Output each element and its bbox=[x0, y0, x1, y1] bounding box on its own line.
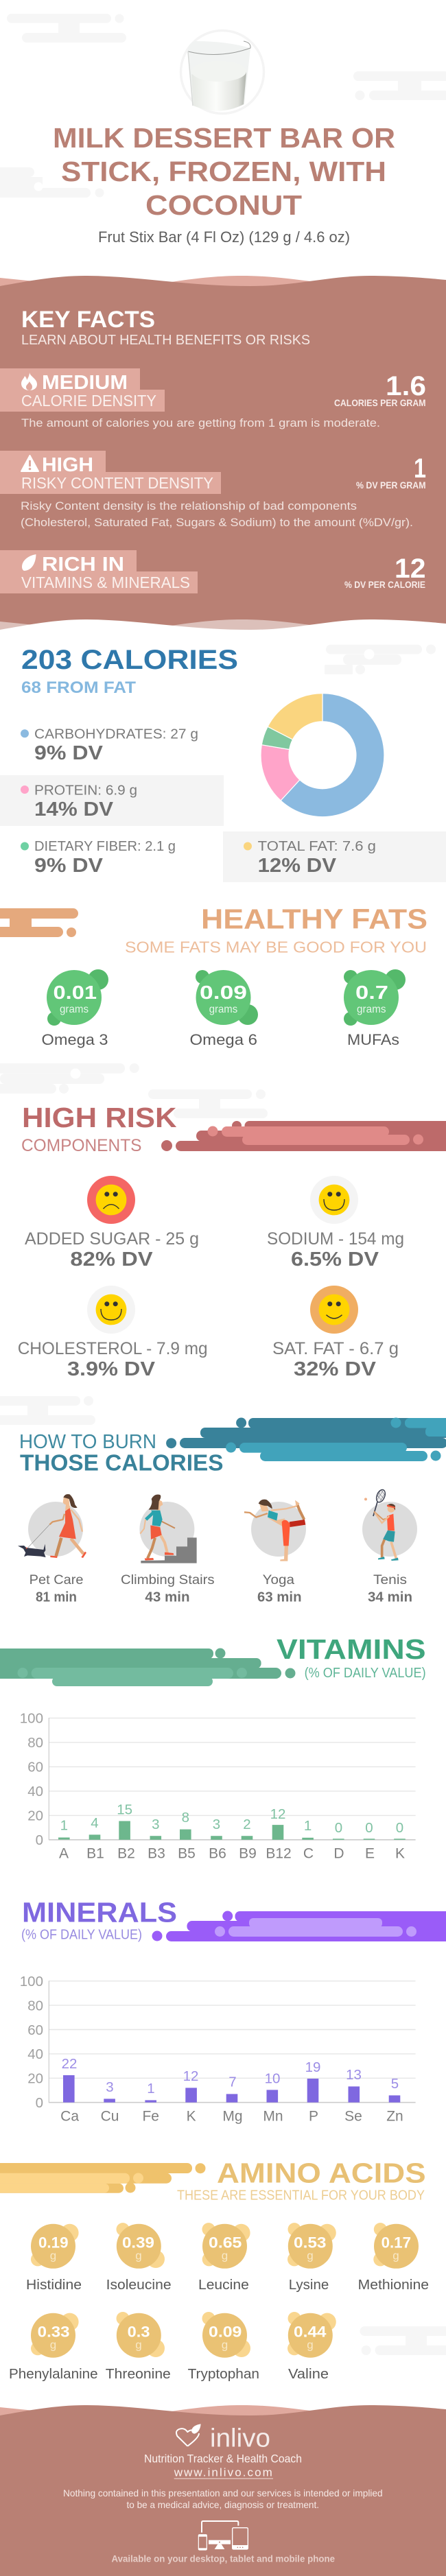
saturated fat bbox=[272, 1286, 399, 1380]
bar chart: vitamins: 3 bbox=[152, 1817, 160, 1832]
methionine: Methionine bbox=[358, 2278, 429, 2293]
methionine bbox=[358, 2223, 429, 2293]
panel: minerals bbox=[20, 1897, 446, 2125]
icon: devices bbox=[198, 2521, 248, 2550]
panel: footer bbox=[0, 2405, 446, 2576]
protein: 14% DV bbox=[34, 799, 114, 820]
protein: PROTEIN: 6.9 g bbox=[34, 783, 137, 799]
title: COCONUT bbox=[145, 189, 302, 221]
bar chart: minerals: 60 bbox=[27, 2022, 43, 2038]
added sugar: 82% DV bbox=[70, 1249, 153, 1271]
subheading: from fat: 68 FROM FAT bbox=[21, 678, 136, 697]
activity: climbing stairs: 43 min bbox=[145, 1590, 189, 1605]
cholesterol bbox=[18, 1286, 208, 1380]
bar chart: vitamins: 80 bbox=[27, 1735, 43, 1751]
bar chart: vitamins: B5 bbox=[178, 1846, 196, 1862]
panel: healthy fats bbox=[0, 903, 427, 1048]
protein bbox=[0, 775, 224, 826]
bar chart: vitamins bbox=[20, 1711, 416, 1862]
medium calorie density: CALORIES PER GRAM bbox=[334, 397, 425, 408]
high risky content density bbox=[0, 451, 426, 529]
icon: glass of milk bbox=[181, 30, 263, 114]
isoleucine bbox=[106, 2223, 172, 2293]
bar chart: vitamins: A bbox=[59, 1846, 69, 1862]
bar chart: minerals: 80 bbox=[27, 1998, 43, 2013]
bar chart: minerals: K bbox=[187, 2109, 196, 2125]
title: MILK DESSERT BAR OR bbox=[53, 122, 395, 154]
dietary fiber: DIETARY FIBER: 2.1 g bbox=[34, 839, 176, 854]
valine: Valine bbox=[288, 2367, 329, 2382]
methionine: g bbox=[392, 2249, 399, 2262]
isoleucine: 0.39 bbox=[122, 2234, 154, 2252]
high risky content density: HIGH bbox=[42, 454, 93, 476]
high risky content density: % DV PER GRAM bbox=[356, 480, 425, 491]
added sugar: ADDED SUGAR - 25 g bbox=[25, 1229, 199, 1249]
bar chart: minerals: 22 bbox=[62, 2056, 77, 2072]
heading: calories: 203 CALORIES bbox=[21, 645, 238, 675]
omega 3: 0.01 bbox=[54, 982, 97, 1003]
threonine: g bbox=[135, 2338, 142, 2351]
phenylalanine: Phenylalanine bbox=[9, 2367, 98, 2382]
sodium bbox=[267, 1176, 404, 1271]
threonine: 0.3 bbox=[128, 2324, 150, 2341]
subheading: components: COMPONENTS bbox=[21, 1136, 141, 1155]
high risky content density: (Cholesterol, Saturated Fat, Sugars & Sodium) to the amount (%DV/gr). bbox=[21, 517, 413, 529]
bar chart: vitamins: 4 bbox=[91, 1815, 99, 1831]
bar chart: vitamins: 0 bbox=[36, 1832, 43, 1848]
heading: vitamins: VITAMINS bbox=[277, 1633, 426, 1665]
cholesterol: 3.9% DV bbox=[67, 1358, 156, 1380]
disclaimer bbox=[63, 2488, 383, 2510]
panel: how to burn those calories bbox=[0, 1396, 446, 1605]
threonine: Threonine bbox=[106, 2367, 171, 2382]
omega 6 bbox=[189, 970, 258, 1048]
donut chart bbox=[261, 694, 384, 817]
methionine: 0.17 bbox=[382, 2234, 411, 2252]
bar chart: vitamins: 2 bbox=[243, 1817, 251, 1832]
background cloud bbox=[360, 2326, 446, 2355]
histidine: Histidine bbox=[26, 2278, 82, 2293]
bar chart: minerals: 5 bbox=[391, 2076, 399, 2092]
bar chart: vitamins: 20 bbox=[27, 1808, 43, 1824]
added sugar bbox=[25, 1176, 199, 1271]
activity: yoga bbox=[244, 1500, 306, 1605]
bar chart: vitamins: C bbox=[303, 1846, 314, 1862]
bar chart: vitamins: 0 bbox=[396, 1820, 403, 1836]
website link: www.inlivo.com bbox=[174, 2466, 272, 2479]
bar chart: vitamins: 60 bbox=[27, 1760, 43, 1775]
total fat: 12% DV bbox=[258, 855, 337, 877]
heading: key facts: KEY FACTS bbox=[21, 307, 155, 333]
panel: calories and macronutrients bbox=[0, 645, 446, 882]
saturated fat: SAT. FAT - 6.7 g bbox=[272, 1339, 399, 1358]
bar chart: minerals: Cu bbox=[101, 2109, 119, 2125]
heading: amino acids: AMINO ACIDS bbox=[217, 2158, 426, 2189]
decorative banner: teal bbox=[166, 1417, 446, 1461]
carbohydrates: CARBOHYDRATES: 27 g bbox=[34, 727, 198, 742]
heading: minerals: MINERALS bbox=[22, 1897, 177, 1928]
bar chart: minerals: 7 bbox=[228, 2075, 237, 2090]
heading: those calories: THOSE CALORIES bbox=[20, 1450, 224, 1476]
disclaimer: Nothing contained in this presentation and our services is intended or implied bbox=[63, 2488, 383, 2498]
mufas: MUFAs bbox=[347, 1031, 399, 1048]
tryptophan: g bbox=[222, 2338, 228, 2351]
lysine: Lysine bbox=[289, 2278, 329, 2293]
bar chart: minerals: Zn bbox=[386, 2109, 403, 2125]
heading: healthy fats: HEALTHY FATS bbox=[201, 903, 427, 935]
bar chart: minerals: 19 bbox=[305, 2059, 320, 2075]
title: STICK, FROZEN, WITH bbox=[61, 156, 386, 187]
mufas bbox=[344, 969, 406, 1048]
background clouds bbox=[0, 1063, 268, 1118]
bar chart: minerals: 1 bbox=[147, 2081, 155, 2096]
medium calorie density: CALORIE DENSITY bbox=[21, 392, 156, 410]
subheading: daily value: (% OF DAILY VALUE) bbox=[305, 1666, 426, 1681]
bar chart: minerals: 20 bbox=[27, 2071, 43, 2087]
omega 6: 0.09 bbox=[200, 982, 247, 1003]
subheading: SOME FATS MAY BE GOOD FOR YOU bbox=[125, 938, 427, 956]
disclaimer: to be a medical advice, diagnosis or treatment. bbox=[126, 2499, 319, 2510]
bar chart: vitamins: K bbox=[395, 1846, 405, 1862]
panel: high risk components bbox=[0, 1063, 446, 1380]
lysine bbox=[287, 2223, 336, 2293]
bar chart: vitamins: B12 bbox=[266, 1846, 292, 1862]
bar chart: minerals: Ca bbox=[60, 2109, 79, 2125]
activity: climbing stairs: Climbing Stairs bbox=[121, 1573, 215, 1587]
bar chart: vitamins: 0 bbox=[365, 1820, 373, 1836]
histidine bbox=[26, 2224, 82, 2293]
bar chart: vitamins: 0 bbox=[335, 1820, 342, 1836]
bar chart: vitamins: 8 bbox=[182, 1810, 189, 1825]
medium calorie density: MEDIUM bbox=[42, 372, 128, 394]
background cloud bbox=[0, 1396, 95, 1425]
heading: how to burn: HOW TO BURN bbox=[19, 1431, 156, 1453]
icon: woman climbing stairs bbox=[140, 1494, 197, 1563]
bar chart: minerals: Fe bbox=[142, 2109, 159, 2125]
bar chart: vitamins: B1 bbox=[86, 1846, 104, 1862]
rich in vitamins and minerals: RICH IN bbox=[42, 554, 124, 576]
rich in vitamins and minerals bbox=[0, 550, 425, 593]
bar chart: minerals: Se bbox=[344, 2109, 362, 2125]
isoleucine: Isoleucine bbox=[106, 2278, 172, 2293]
leucine: Leucine bbox=[198, 2278, 249, 2293]
bar chart: vitamins: 3 bbox=[213, 1817, 220, 1832]
saturated fat: 32% DV bbox=[294, 1358, 377, 1380]
tryptophan bbox=[188, 2312, 259, 2382]
bar chart: minerals: 10 bbox=[265, 2071, 280, 2087]
bar chart: minerals: 0 bbox=[36, 2095, 43, 2111]
decorative banner: orange bbox=[0, 908, 78, 937]
histidine: 0.19 bbox=[38, 2234, 69, 2252]
lysine: 0.53 bbox=[294, 2234, 327, 2252]
omega 3 bbox=[41, 969, 108, 1048]
leucine: g bbox=[222, 2249, 228, 2262]
histidine: g bbox=[50, 2249, 56, 2262]
heading: high risk: HIGH RISK bbox=[22, 1102, 177, 1133]
valine: 0.44 bbox=[294, 2324, 327, 2341]
bar chart: minerals: Mg bbox=[222, 2109, 243, 2125]
bar chart: vitamins: B2 bbox=[117, 1846, 135, 1862]
bar chart: minerals: P bbox=[309, 2109, 318, 2125]
activity: pet care bbox=[18, 1494, 86, 1605]
activity: tennis: 34 min bbox=[368, 1590, 412, 1605]
bar chart: vitamins: 1 bbox=[304, 1818, 312, 1834]
lysine: g bbox=[307, 2249, 314, 2262]
bar chart: vitamins: E bbox=[365, 1846, 375, 1862]
title bbox=[53, 122, 395, 221]
bar chart: vitamins: 15 bbox=[117, 1801, 132, 1818]
rich in vitamins and minerals: VITAMINS & MINERALS bbox=[21, 574, 190, 591]
tagline: Nutrition Tracker & Health Coach bbox=[144, 2452, 302, 2466]
icon: flame bbox=[21, 373, 37, 390]
activity: tennis: Tenis bbox=[373, 1573, 407, 1587]
bar chart: minerals: 100 bbox=[20, 1974, 43, 1989]
activity: tennis bbox=[362, 1489, 417, 1605]
omega 3: Omega 3 bbox=[41, 1031, 108, 1048]
omega 3: grams bbox=[60, 1004, 89, 1015]
bar chart: minerals: Mn bbox=[263, 2109, 283, 2125]
icon: tennis player bbox=[364, 1489, 399, 1561]
activity: climbing stairs bbox=[121, 1494, 215, 1605]
activity: yoga: 63 min bbox=[257, 1590, 302, 1605]
medium calorie density bbox=[0, 368, 426, 429]
icon: woman in yoga pose bbox=[244, 1500, 305, 1561]
high risky content density: Risky Content density is the relationship of bad components bbox=[21, 500, 357, 512]
icon: warning triangle bbox=[21, 456, 38, 471]
rich in vitamins and minerals: % DV PER CALORIE bbox=[344, 579, 425, 590]
activity: pet care: 81 min bbox=[36, 1590, 77, 1605]
tryptophan: 0.09 bbox=[209, 2324, 242, 2341]
cholesterol: CHOLESTEROL - 7.9 mg bbox=[18, 1339, 208, 1358]
medium calorie density: The amount of calories you are getting from 1 gram is moderate. bbox=[21, 417, 380, 429]
omega 6: Omega 6 bbox=[189, 1031, 257, 1048]
panel: vitamins bbox=[0, 1633, 426, 1862]
availability note: Available on your desktop, tablet and mobile phone bbox=[111, 2553, 335, 2564]
tryptophan: Tryptophan bbox=[188, 2367, 259, 2382]
bar chart: minerals: 3 bbox=[106, 2079, 114, 2095]
decorative banner: red bbox=[161, 1121, 446, 1151]
bar chart: vitamins: 1 bbox=[60, 1818, 68, 1833]
high risky content density: RISKY CONTENT DENSITY bbox=[21, 474, 213, 492]
valine bbox=[287, 2312, 336, 2382]
bar chart: vitamins: B6 bbox=[209, 1846, 226, 1862]
dietary fiber bbox=[21, 839, 176, 877]
sodium: 6.5% DV bbox=[291, 1249, 379, 1271]
phenylalanine: g bbox=[50, 2338, 56, 2351]
rich in vitamins and minerals: 12 bbox=[395, 554, 425, 584]
bar chart: vitamins: B9 bbox=[239, 1846, 257, 1862]
bar chart: vitamins: 100 bbox=[20, 1711, 43, 1727]
dietary fiber: 9% DV bbox=[34, 855, 104, 877]
bar chart: vitamins: 12 bbox=[270, 1806, 285, 1822]
high risky content density: 1 bbox=[414, 453, 426, 484]
icon: woman walking dog bbox=[18, 1494, 86, 1558]
bar chart: vitamins: 40 bbox=[27, 1784, 43, 1799]
activity: yoga: Yoga bbox=[263, 1573, 294, 1587]
logo: inlivo bbox=[176, 2424, 270, 2453]
panel: key facts bbox=[0, 276, 446, 646]
isoleucine: g bbox=[135, 2249, 142, 2262]
threonine bbox=[106, 2312, 171, 2382]
sodium: SODIUM - 154 mg bbox=[267, 1229, 404, 1249]
header: product image and title bbox=[53, 30, 395, 246]
bar chart: vitamins: D bbox=[333, 1846, 344, 1862]
omega 6: grams bbox=[209, 1004, 237, 1015]
phenylalanine: 0.33 bbox=[38, 2324, 70, 2341]
medium calorie density: 1.6 bbox=[386, 371, 426, 401]
bar chart: minerals: 13 bbox=[346, 2067, 362, 2083]
mufas: grams bbox=[357, 1004, 386, 1015]
panel: amino acids bbox=[0, 2158, 446, 2382]
decorative banner: green bbox=[0, 1648, 295, 1686]
subtitle: Frut Stix Bar (4 Fl Oz) (129 g / 4.6 oz) bbox=[98, 228, 350, 246]
subheading: THESE ARE ESSENTIAL FOR YOUR BODY bbox=[177, 2188, 425, 2203]
activity: pet care: Pet Care bbox=[30, 1573, 84, 1587]
carbohydrates bbox=[21, 727, 198, 764]
leucine: 0.65 bbox=[209, 2234, 242, 2252]
subheading: LEARN ABOUT HEALTH BENEFITS OR RISKS bbox=[21, 332, 310, 348]
decorative banner: yellow bbox=[0, 2163, 206, 2193]
background cloud bbox=[325, 645, 436, 674]
total fat: TOTAL FAT: 7.6 g bbox=[258, 839, 376, 854]
bar chart: vitamins: B3 bbox=[148, 1846, 165, 1862]
mufas: 0.7 bbox=[355, 982, 388, 1003]
background clouds: top area bbox=[0, 14, 446, 198]
bar chart: minerals: 12 bbox=[183, 2068, 198, 2084]
valine: g bbox=[307, 2338, 314, 2351]
bar chart: minerals bbox=[20, 1974, 416, 2125]
bar chart: minerals: 40 bbox=[27, 2046, 43, 2062]
decorative banner: purple bbox=[152, 1911, 446, 1941]
carbohydrates: 9% DV bbox=[34, 742, 104, 764]
total fat bbox=[223, 831, 446, 882]
logo: inlivo: inlivo bbox=[210, 2424, 270, 2453]
leucine bbox=[198, 2223, 250, 2293]
subheading: daily value: (% OF DAILY VALUE) bbox=[21, 1928, 142, 1943]
phenylalanine bbox=[9, 2313, 98, 2382]
icon: leaf bbox=[22, 554, 36, 571]
